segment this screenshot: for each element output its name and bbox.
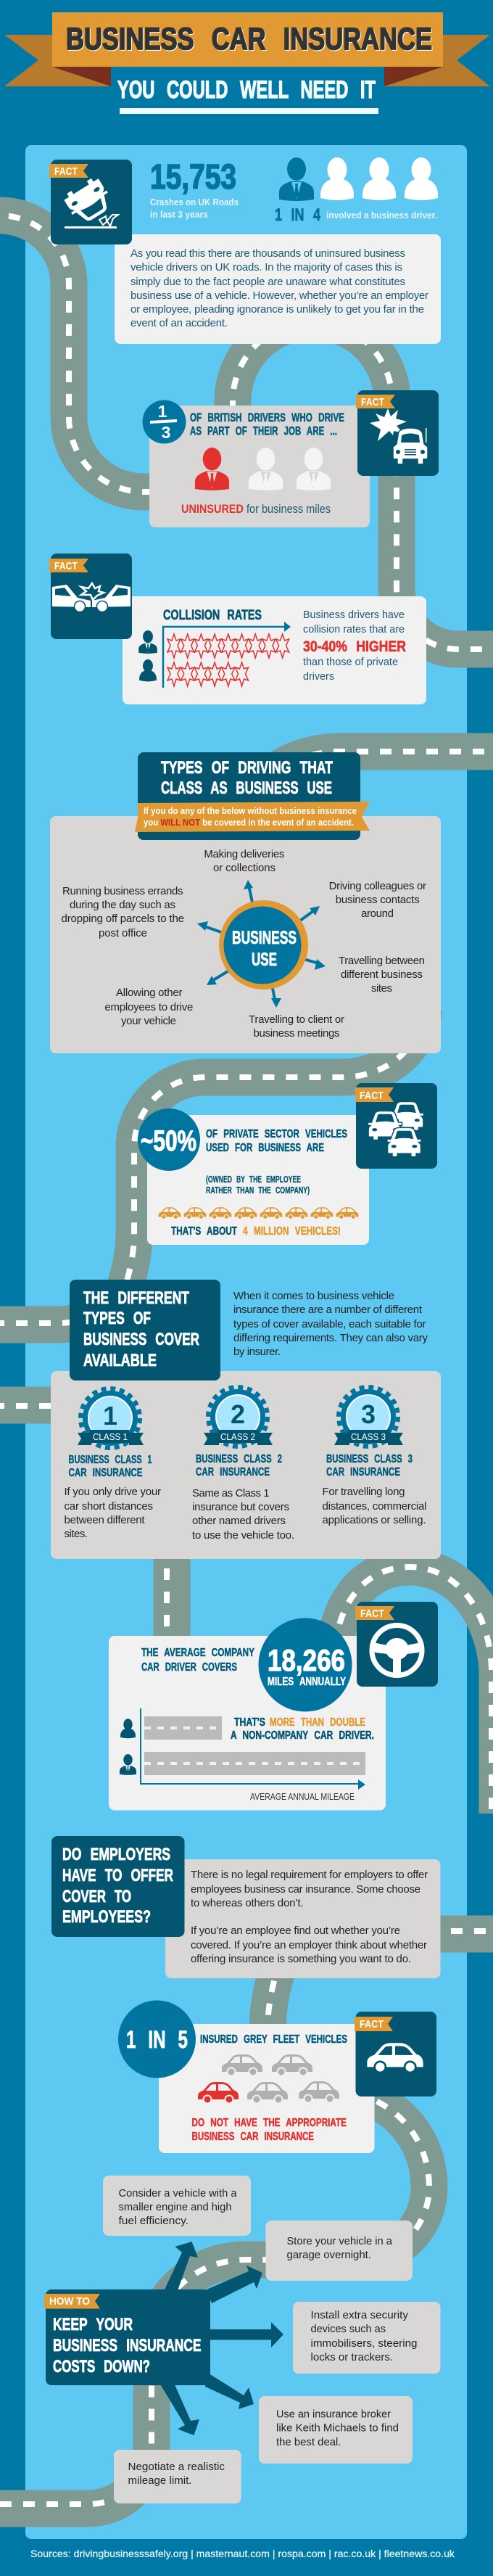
- text: cover intro: [233, 1290, 428, 1358]
- class headings: CAR INSURANCE: [196, 1466, 270, 1478]
- heading: [206, 1128, 347, 1154]
- caption: [191, 2117, 347, 2143]
- collision text: than those of private: [303, 656, 398, 668]
- tip: broker: the best deal.: [276, 2436, 341, 2448]
- circle: miles annually: 18,266: [268, 1643, 345, 1677]
- tip: smaller engine: [103, 2176, 251, 2236]
- text: class 1: sites.: [64, 1528, 88, 1540]
- tip: security devices: [293, 2302, 441, 2374]
- fact tile: collision: [49, 554, 132, 639]
- tip: security devices: Install extra security: [310, 2309, 409, 2321]
- arrows: [197, 880, 326, 1008]
- text: other employees: Allowing other: [116, 987, 183, 999]
- stat: crashes: 15,753: [150, 158, 236, 197]
- text: other employees: employees to drive: [104, 1001, 193, 1013]
- fact flag: FACT: [360, 1608, 384, 1620]
- text: deliveries: or collections: [213, 862, 276, 874]
- badge: class 1: 1: [103, 1401, 117, 1431]
- badge: class 1: CLASS 1: [93, 1431, 128, 1442]
- text: between sites: sites: [371, 982, 392, 995]
- warning ribbon: you WILL NOT be covered in the event of an accident.: [144, 817, 354, 828]
- circle: 50 percent: ~50%: [141, 1125, 196, 1157]
- road 2: [233, 321, 493, 649]
- heading: do employers have to offer cover: COVER TO: [62, 1887, 131, 1906]
- text: between sites: [339, 955, 425, 995]
- tip: broker: like Keith Michaels to find: [276, 2421, 399, 2435]
- fact tile: white car: [355, 2012, 436, 2096]
- text: class 2: Same as Class 1: [192, 1487, 270, 1499]
- text: class 1: [64, 1486, 161, 1540]
- how to flag: HOW TO: [49, 2295, 90, 2308]
- caption: BUSINESS CAR INSURANCE: [191, 2131, 314, 2143]
- text: class 2: insurance but covers: [192, 1501, 289, 1513]
- chart: mileage bars: [120, 1708, 365, 1790]
- text: errands: during the day such as: [70, 899, 175, 911]
- collision text: collision rates that are: [303, 623, 405, 635]
- business use circle: BUSINESS: [232, 928, 297, 948]
- heading: do employers have to offer cover: HAVE TO OFFER: [62, 1866, 173, 1885]
- star rows: [167, 634, 289, 686]
- text: cover intro: by insurer.: [233, 1346, 281, 1358]
- business use circle: USE: [252, 950, 277, 970]
- how to flag: [44, 2294, 100, 2308]
- fact tile: overturned car: [49, 160, 132, 244]
- warning ribbon: If you do any of the below without business insurance: [144, 805, 357, 816]
- caption: 4 MILLION VEHICLES!: [243, 1225, 341, 1238]
- tip: garage: garage overnight.: [287, 2249, 371, 2261]
- fact flag: FACT: [54, 560, 78, 572]
- panel: employer cover text: There is no legal requirement for employers to offer: [191, 1869, 428, 1881]
- circle: 50 percent: [138, 1108, 200, 1171]
- badge: class 1: [78, 1388, 144, 1448]
- stat: 1 in 4: involved a business driver.: [326, 210, 437, 221]
- fact flag: FACT: [360, 1090, 384, 1102]
- road 10: [268, 1959, 281, 2031]
- panel: annual mileage: [109, 1636, 386, 1811]
- heading text: COSTS DOWN?: [53, 2357, 150, 2377]
- text: class 3: distances, commercial: [322, 1500, 426, 1513]
- text: client meetings: [249, 1013, 344, 1040]
- heading box: TYPES OF DRIVING THAT: [161, 758, 333, 778]
- icons: three men: [195, 448, 331, 490]
- text: client meetings: Travelling to client or: [249, 1013, 344, 1026]
- fact tile: steering wheel: [355, 1602, 438, 1687]
- road 7: [167, 1545, 172, 1647]
- fact flag: FACT: [54, 165, 78, 178]
- heading box: CLASS AS BUSINESS USE: [161, 778, 332, 798]
- icon: car: [367, 2043, 423, 2073]
- tip: smaller engine: Consider a vehicle with a: [119, 2187, 237, 2200]
- heading: COLLISION RATES: [163, 608, 262, 623]
- caption: THAT'S ABOUT: [171, 1225, 237, 1238]
- comparison text: THAT'S: [234, 1716, 265, 1729]
- icon: truck: [393, 428, 428, 464]
- business use circle: [219, 900, 308, 989]
- comparison text: A NON-COMPANY CAR DRIVER.: [231, 1729, 374, 1742]
- text: class 1: between different: [64, 1514, 145, 1526]
- badge: class 3: 3: [361, 1399, 376, 1429]
- stat: 1 in 4: [275, 205, 437, 225]
- heading: types of cover: AVAILABLE: [83, 1351, 157, 1370]
- panel: crash fact text: or employee, pleading ignorance is unlikely to get you far in the: [130, 303, 424, 316]
- chart axes: [163, 622, 291, 688]
- icon: overturned car: [60, 174, 118, 229]
- heading: USED FOR BUSINESS ARE: [206, 1142, 324, 1154]
- panel: crash fact text: vehicle drivers on UK roads. In the majority of cases this is: [130, 261, 402, 273]
- heading: types of cover: THE DIFFERENT: [83, 1288, 189, 1308]
- heading: how to keep costs down: [44, 2289, 210, 2385]
- icons: five cars: [198, 2054, 339, 2104]
- heading text: KEEP YOUR: [53, 2315, 133, 2334]
- icon: burst: [370, 408, 407, 441]
- heading: [190, 411, 344, 438]
- note: (OWNED BY THE EMPLOYEE: [206, 1174, 301, 1185]
- panel: crash fact text: simply due to the fact people are unaware what constitutes: [130, 276, 405, 288]
- panel: employer cover text: offering insurance is something you want to do.: [191, 1953, 411, 1965]
- tip: security devices: immobilisers, steering: [310, 2337, 418, 2350]
- text: other employees: [104, 987, 193, 1027]
- comparison text: [231, 1716, 374, 1742]
- text: cover intro: differing requirements. They can also vary: [233, 1332, 428, 1344]
- panel: employer cover text: employees business car insurance. Some choose: [191, 1883, 420, 1896]
- icon: cars: [368, 1101, 424, 1157]
- circle: miles annually: [258, 1618, 352, 1712]
- subtitle: YOU COULD WELL NEED IT: [117, 76, 376, 104]
- tip: mileage limit: mileage limit.: [128, 2474, 191, 2487]
- heading: THE AVERAGE COMPANY: [141, 1647, 254, 1659]
- text: client meetings: business meetings: [254, 1027, 339, 1040]
- panel: employer cover text: covered. If you’re an employer think about whether: [191, 1939, 427, 1951]
- text: deliveries: [204, 848, 284, 874]
- road 4: [125, 1008, 424, 1288]
- class headings: BUSINESS CLASS 3: [326, 1453, 413, 1465]
- circle: one third: [142, 400, 186, 444]
- icon: collision cars: [52, 583, 130, 612]
- text: errands: [61, 885, 184, 939]
- text: colleagues: Driving colleagues or: [329, 880, 426, 892]
- text: errands: post office: [99, 927, 147, 939]
- text: class 2: other named drivers: [192, 1515, 286, 1527]
- text: cover intro: When it comes to business vehicle: [233, 1290, 394, 1302]
- road 6: [0, 1405, 65, 1406]
- caption: [181, 503, 331, 516]
- panel: one third uninsured: [149, 406, 370, 527]
- heading text: BUSINESS INSURANCE: [53, 2336, 202, 2355]
- text: between sites: different business: [341, 968, 423, 981]
- panel: employer cover text: to whereas others don’t.: [191, 1897, 303, 1909]
- panel: crash fact text: event of an accident.: [130, 317, 228, 329]
- text: colleagues: business contacts: [336, 894, 420, 906]
- heading: [141, 1647, 254, 1674]
- panel: crash fact text: As you read this there are thousands of uninsured business: [130, 247, 405, 260]
- class headings: CAR INSURANCE: [68, 1467, 143, 1479]
- text: colleagues: around: [361, 908, 394, 920]
- tip: smaller engine: smaller engine and high: [119, 2201, 232, 2213]
- tip: broker: Use an insurance broker: [276, 2408, 391, 2420]
- circle: 1 in 5: [118, 2001, 196, 2078]
- road 11: [0, 2093, 429, 2509]
- collision text: drivers: [303, 670, 334, 683]
- text: errands: dropping off parcels to the: [61, 913, 184, 925]
- note: RATHER THAN THE COMPANY): [206, 1185, 310, 1196]
- road 1: [0, 215, 167, 492]
- circle: one third: 1: [158, 402, 167, 421]
- panel: private sector vehicles: [147, 1115, 369, 1245]
- heading: types of cover: BUSINESS COVER: [83, 1330, 199, 1349]
- text: class 1: car short distances: [64, 1500, 153, 1513]
- text: class 3: [322, 1486, 426, 1526]
- fact tile: truck crash: [356, 390, 439, 476]
- class headings: BUSINESS CLASS 2: [196, 1453, 282, 1465]
- tip: security devices: locks or trackers.: [310, 2351, 393, 2363]
- tip: mileage limit: Negotiate a realistic: [128, 2461, 225, 2473]
- class headings: BUSINESS CLASS 1: [68, 1454, 152, 1466]
- collision text: 30-40% HIGHER: [303, 638, 406, 655]
- badge: class 2: CLASS 2: [220, 1431, 255, 1442]
- tip: garage: Store your vehicle in a: [287, 2235, 393, 2247]
- note: [206, 1174, 310, 1196]
- heading: do employers have to offer cover: [51, 1836, 184, 1937]
- circle: 1 in 5: 1 IN 5: [126, 2026, 188, 2054]
- axis label: AVERAGE ANNUAL MILEAGE: [250, 1791, 355, 1802]
- heading: OF BRITISH DRIVERS WHO DRIVE: [190, 411, 344, 424]
- text: other employees: your vehicle: [121, 1015, 176, 1027]
- heading text: [53, 2315, 202, 2377]
- text: cover intro: insurance there are a number of different: [233, 1304, 423, 1316]
- circle: miles annually: MILES ANNUALLY: [268, 1676, 346, 1688]
- arrows: how to tips: [160, 2242, 283, 2435]
- tip: smaller engine: fuel efficiency.: [119, 2215, 188, 2227]
- road 9: [428, 1931, 493, 1934]
- caption: UNINSURED: [181, 503, 244, 516]
- fact flag: FACT: [360, 2018, 384, 2030]
- text: class 1: If you only drive your: [64, 1486, 161, 1498]
- text: deliveries: Making deliveries: [204, 848, 284, 860]
- collision text: Business drivers have: [303, 609, 405, 621]
- heading: do employers have to offer cover: EMPLOYEES?: [62, 1907, 151, 1927]
- fact flag: FACT: [361, 396, 384, 408]
- text: errands: Running business errands: [62, 885, 183, 897]
- tip: garage: [265, 2221, 413, 2281]
- title banner: [4, 12, 490, 86]
- collision text: [303, 609, 406, 683]
- stat: crashes: Crashes on UK Roads: [150, 197, 239, 207]
- sources: Sources: drivingbusinesssafely.org | masternaut.com | rospa.com | rac.co.uk | fleetnews.co.uk: [30, 2548, 455, 2559]
- heading box: [138, 752, 360, 840]
- panel: classes of cover: [51, 1371, 441, 1559]
- subtitle: [117, 76, 378, 114]
- road 8: [335, 1567, 493, 1814]
- tip: mileage limit: [114, 2450, 241, 2503]
- text: class 2: [192, 1487, 294, 1542]
- text: class 3: For travelling long: [322, 1486, 405, 1498]
- caption: for business miles: [246, 503, 331, 516]
- heading: do employers have to offer cover: DO EMPLOYERS: [62, 1845, 170, 1864]
- icons: orange cars: [159, 1207, 358, 1219]
- panel: business use: [50, 752, 441, 1053]
- comparison text: MORE THAN DOUBLE: [270, 1716, 365, 1729]
- badge: class 2: [204, 1387, 273, 1447]
- panel: crash fact text: [115, 234, 441, 344]
- class headings: [68, 1453, 413, 1479]
- stat: 1 in 4: 1 IN 4: [275, 205, 320, 225]
- panel: crash fact text: business use of a vehicle. However, whether you’re an employer: [130, 289, 428, 302]
- panel: employer cover text: [165, 1859, 441, 1978]
- class headings: CAR INSURANCE: [326, 1466, 400, 1478]
- text: between sites: Travelling between: [339, 955, 425, 967]
- panel: collision rates: [123, 596, 426, 704]
- heading: INSURED GREY FLEET VEHICLES: [200, 2033, 347, 2046]
- badge: class 3: [334, 1387, 403, 1447]
- warning ribbon: [135, 802, 370, 832]
- text: cover intro: types of cover available, each suitable for: [233, 1318, 426, 1330]
- text: colleagues: [329, 880, 426, 920]
- icons: 1 in 4 people: [279, 157, 438, 201]
- road 3: [257, 752, 493, 791]
- icons: drivers: [138, 630, 157, 681]
- heading: types of cover: [70, 1280, 220, 1380]
- icon: steering wheel: [372, 1625, 422, 1676]
- stat: crashes: [150, 158, 239, 220]
- badge: class 2: 2: [231, 1399, 245, 1429]
- stat: crashes: in last 3 years: [150, 209, 208, 220]
- text: class 2: to use the vehicle too.: [192, 1529, 294, 1542]
- caption: [171, 1225, 341, 1238]
- heading: AS PART OF THEIR JOB ARE ...: [190, 424, 337, 438]
- caption: DO NOT HAVE THE APPROPRIATE: [191, 2117, 347, 2129]
- heading: OF PRIVATE SECTOR VEHICLES: [206, 1128, 347, 1140]
- road 5: [0, 1320, 80, 1325]
- panel: employer cover text: If you’re an employee find out whether you’re: [191, 1925, 400, 1937]
- badge: class 3: CLASS 3: [351, 1431, 386, 1442]
- heading: CAR DRIVER COVERS: [141, 1661, 237, 1674]
- tip: security devices: devices such as: [310, 2323, 386, 2335]
- fact tile: traffic: [355, 1083, 437, 1169]
- tip: broker: [259, 2396, 413, 2464]
- panel: grey fleet: [159, 2024, 374, 2153]
- heading: types of cover: TYPES OF: [83, 1309, 151, 1328]
- text: class 3: applications or selling.: [322, 1514, 426, 1526]
- circle: one third: 3: [162, 423, 170, 442]
